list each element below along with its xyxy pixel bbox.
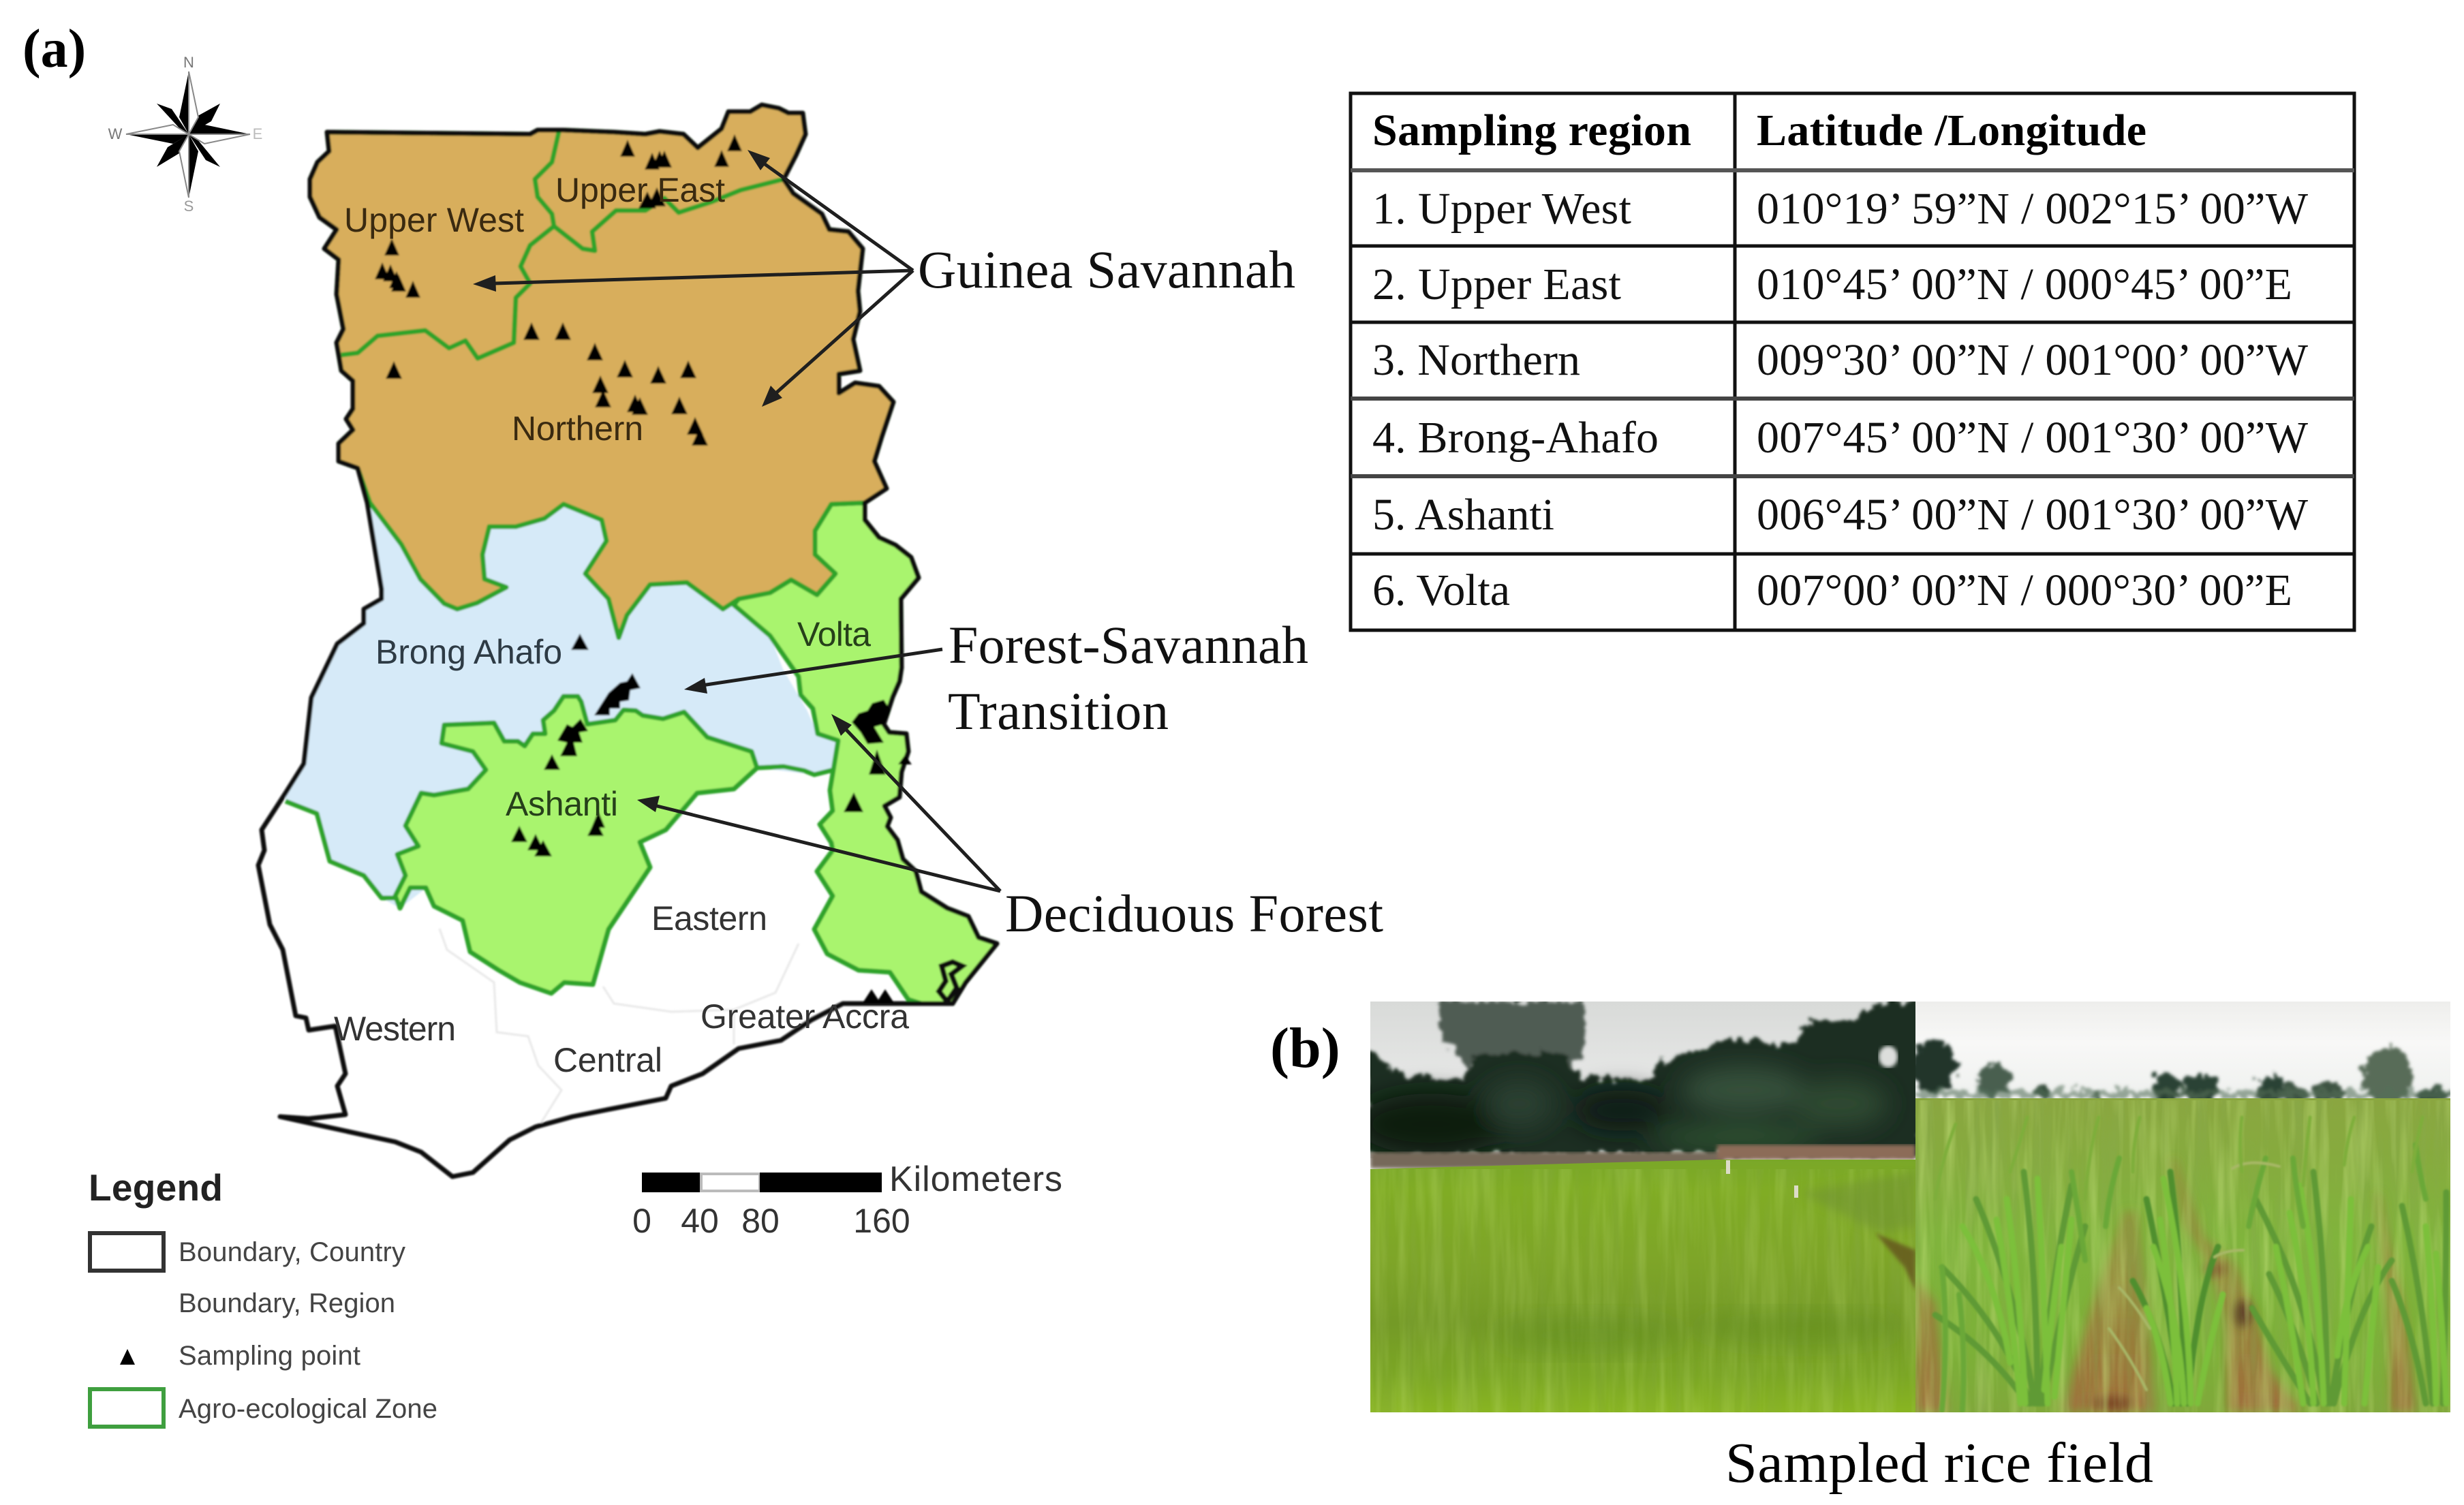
map of Ghana with agro-ecological zones xyxy=(258,105,997,1177)
table rows: 007°00’ 00”N / 000°30’ 00”E xyxy=(1757,565,2292,615)
map region labels: Brong Ahafo xyxy=(375,633,562,671)
scale bar: 40 xyxy=(681,1202,719,1240)
zone: forest-savannah transition xyxy=(286,497,838,908)
green rice xyxy=(1370,1160,1915,1412)
rice blades xyxy=(1935,1117,2446,1410)
arrows: Deciduous Forest xyxy=(637,714,1000,891)
map region labels: Upper West xyxy=(344,201,524,239)
icon: compass rose: W xyxy=(108,125,123,142)
map region labels: Ashanti xyxy=(506,785,618,823)
table rows: 010°19’ 59”N / 002°15’ 00”W xyxy=(1757,184,2309,234)
map region labels: Greater Accra xyxy=(700,997,909,1036)
treeline xyxy=(1366,1002,1922,1155)
sky xyxy=(1915,1002,2450,1104)
legend item: sampling point: Sampling point xyxy=(179,1341,360,1371)
brown field edge xyxy=(1370,1152,1725,1168)
legend item: agro-ecological zone xyxy=(90,1389,437,1427)
legend xyxy=(89,1166,437,1427)
map region labels: Volta xyxy=(797,615,871,653)
photo: rice field, left xyxy=(1356,1002,1922,1412)
sampling point clusters xyxy=(557,673,891,756)
arrows: Guinea Savannah xyxy=(473,150,913,407)
label: Forest-Savannah Transition xyxy=(948,615,1308,741)
table header: Sampling region xyxy=(1372,106,1691,155)
map region labels: Northern xyxy=(512,409,643,448)
map region labels: Central xyxy=(553,1041,662,1079)
arrow: Forest-Savannah Transition xyxy=(684,649,942,694)
table rows: 006°45’ 00”N / 001°30’ 00”W xyxy=(1757,490,2309,540)
pale region boundaries xyxy=(440,929,799,1123)
zone: deciduous forest, Volta xyxy=(734,503,997,1004)
table header: Latitude /Longitude xyxy=(1757,106,2146,155)
table rows: 009°30’ 00”N / 001°00’ 00”W xyxy=(1757,335,2309,385)
dark patches xyxy=(1492,1312,1901,1354)
Volta coast scribble xyxy=(939,962,962,1002)
legend item: country boundary xyxy=(90,1233,405,1271)
scale bar xyxy=(632,1160,1062,1240)
scale bar: 80 xyxy=(741,1202,780,1240)
shaded tree masses xyxy=(1356,1066,1888,1155)
panel label: (a): (a) xyxy=(22,19,86,79)
table rows: 1. Upper West xyxy=(1372,184,1631,234)
map region labels xyxy=(334,171,909,1079)
table rows: 2. Upper East xyxy=(1372,260,1621,309)
table header xyxy=(1372,106,2146,155)
icon: compass rose xyxy=(108,54,262,215)
sampling points xyxy=(375,134,912,1003)
map region labels: Eastern xyxy=(651,899,767,937)
label: Forest-Savannah Transition: Transition xyxy=(948,681,1169,741)
table rows: 6. Volta xyxy=(1372,565,1510,615)
photo: rice field, right xyxy=(1912,1002,2450,1412)
scale bar: Kilometers xyxy=(889,1160,1062,1199)
caption: Sampled rice field: Sampled rice field xyxy=(1725,1431,2153,1495)
icon: compass rose: S xyxy=(184,198,194,215)
country boundary xyxy=(258,105,997,1177)
zone boundary: forest-savannah south edge xyxy=(286,766,833,898)
legend title: Legend xyxy=(89,1166,223,1209)
table rows: 010°45’ 00”N / 000°45’ 00”E xyxy=(1757,260,2292,309)
table rows xyxy=(1372,184,2309,615)
zone: deciduous forest, Ashanti xyxy=(395,696,757,993)
marker sticks xyxy=(1728,1160,1796,1198)
table rows: 4. Brong-Ahafo xyxy=(1372,413,1659,463)
table rows: 007°45’ 00”N / 001°30’ 00”W xyxy=(1757,413,2309,463)
green rice xyxy=(1915,1098,2450,1412)
zone: guinea savannah xyxy=(310,105,893,638)
table rows: 5. Ashanti xyxy=(1372,490,1554,540)
sky xyxy=(1370,1002,1915,1158)
legend item: country boundary: Boundary, Country xyxy=(179,1237,405,1267)
map region labels: Upper East xyxy=(555,171,725,209)
map region labels: Western xyxy=(334,1010,456,1048)
label: Deciduous Forest: Deciduous Forest xyxy=(1005,884,1383,943)
sky gap in the trees xyxy=(1879,1046,1898,1068)
table rows: 3. Northern xyxy=(1372,335,1580,385)
soil furrows xyxy=(1915,1159,2416,1412)
icon: compass rose: E xyxy=(253,125,262,142)
streak texture xyxy=(1915,1100,2450,1412)
legend item: region boundary: Boundary, Region xyxy=(179,1288,395,1318)
region boundaries within savannah xyxy=(341,132,784,358)
icon: compass rose: N xyxy=(183,54,194,71)
table grid xyxy=(1351,93,2354,630)
scale bar: 160 xyxy=(853,1202,910,1240)
legend item: agro-ecological zone: Agro-ecological Zone xyxy=(179,1394,437,1424)
horizon trees xyxy=(1912,1039,2450,1105)
scale bar: 0 xyxy=(632,1202,651,1240)
panel label: (b): (b) xyxy=(1270,1017,1340,1080)
table: sampling regions and coordinates xyxy=(1351,93,2354,630)
label: Guinea Savannah: Guinea Savannah xyxy=(918,240,1295,299)
label: Forest-Savannah Transition: Forest-Savannah xyxy=(949,615,1308,674)
